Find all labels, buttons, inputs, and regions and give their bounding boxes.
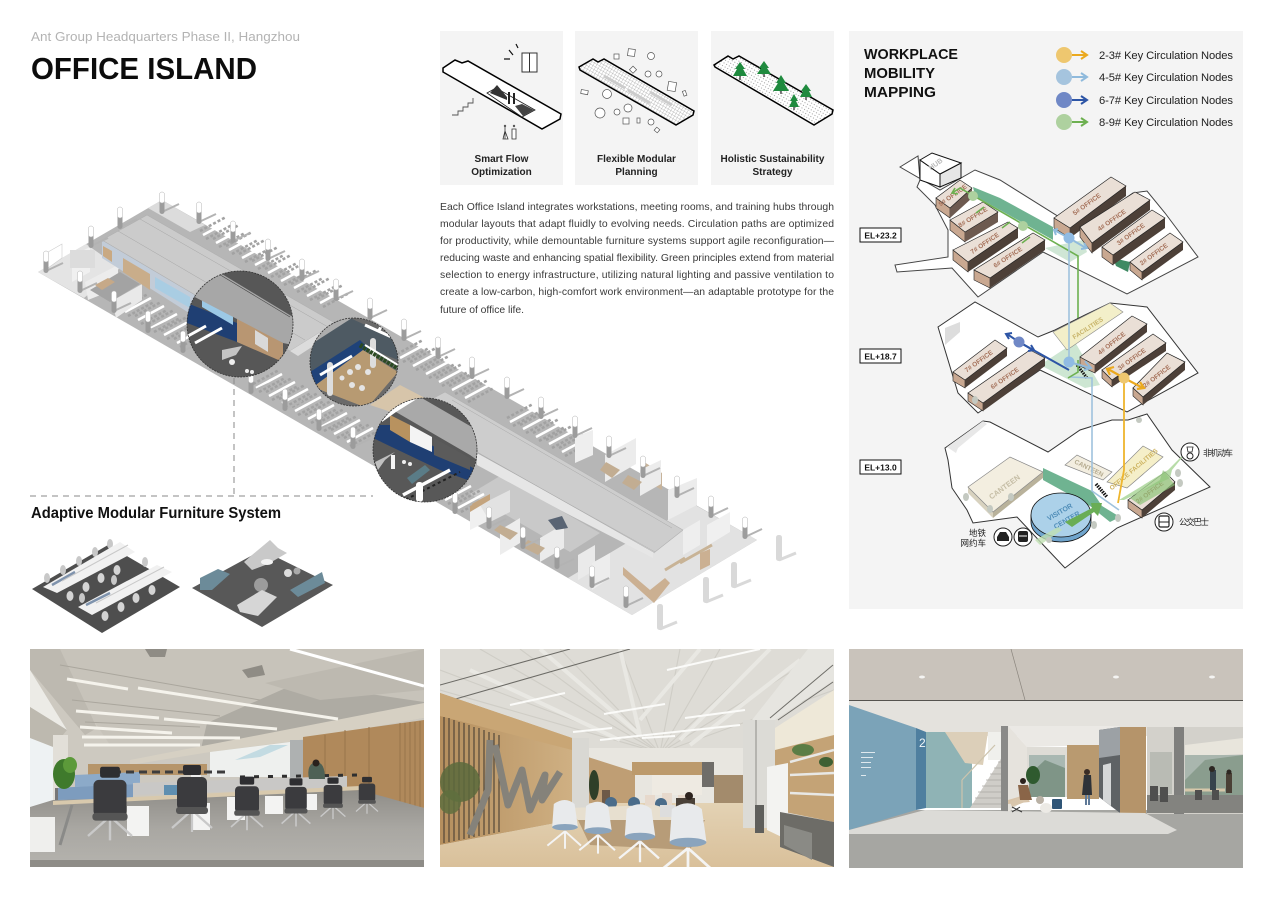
building: hub [920,153,961,187]
card: smart flow optimization: Smart Flow [475,154,529,165]
private offices north row [575,430,730,555]
card: flexible modular planning: Planning [615,167,658,178]
transport icon: non-motor vehicles: 非机动车 [1203,448,1233,458]
magnified view: cafe [310,318,398,408]
structural columns [44,192,796,630]
level plan EL+13.0 [945,396,1210,568]
west end meeting rooms [48,244,142,318]
floor plate [38,200,757,615]
description text: Each Office Island integrates workstations, meeting rooms, and training hubs through [440,202,834,213]
building: 4# office level 2 [1080,316,1147,373]
circulation nodes [968,191,1130,384]
transport icon: metro and ride hailing: 网约车 [960,538,986,548]
magnified view: breakout zone [373,397,477,505]
building: visitor center [1031,493,1091,542]
building: 4# office level 2: 4# OFFICE [1097,331,1128,357]
level plan EL+23.2 [895,153,1198,362]
title: OFFICE ISLAND [31,51,257,86]
elevation tags: EL+18.7 [864,352,897,362]
vertical circulation lines and nodes [1006,229,1144,510]
elevation tags: EL+13.0 [864,462,897,472]
building: 4# office [1080,192,1150,253]
stairs mark [1077,365,1087,378]
legend: 4-5# Key Circulation Nodes [1099,72,1233,84]
callout leader dashed line [30,378,373,496]
building: 5# office [1054,177,1126,238]
level plan EL+18.7 [938,302,1198,413]
private offices south row [470,490,712,603]
building: 3# office level 2 [1102,334,1166,387]
building: 2# office level 2: 2# OFFICE [1142,364,1173,390]
central core south [430,392,683,558]
description text: reducing waste and enhancing spatial flexibility. Green principles extend from material [440,253,834,264]
building: 6# office: 6# OFFICE [992,245,1024,270]
building: canteen west [968,457,1043,518]
building: 2# office level 3 [1128,472,1175,518]
building: canteen east: CANTEEN [1073,459,1105,479]
panel heading: MAPPING [864,84,936,101]
transport icon: non-motor vehicles [1181,443,1233,461]
subtitle: Ant Group Headquarters Phase II, Hangzhou [31,29,300,44]
building: 7# office level 2 [953,340,1007,388]
green entry arrows [1035,448,1190,545]
legend: 6-7# Key Circulation Nodes [1099,95,1233,107]
central core north [102,215,335,356]
building: 3# office level 2: 3# OFFICE [1117,347,1148,372]
transport icon: bus [1155,513,1209,531]
building: 6# office [974,233,1045,288]
building: facilities level 3: OFFICE FACILITIES [1109,447,1160,492]
building: 5# office: 5# OFFICE [1072,192,1103,217]
building: visitor center: VISITOR [1046,503,1074,523]
magnified view: lounge [187,271,293,377]
stairs mark level 3 [1096,484,1107,497]
panel heading: MOBILITY [864,65,935,82]
description text: future of office life. [440,305,524,316]
axonometric office floor [38,192,796,630]
card: holistic sustainability strategy: Strategy [752,167,793,178]
header [31,29,300,86]
card: holistic sustainability strategy: Holistic Sustainability [721,154,825,165]
trees [963,396,1183,543]
description text: for productivity, while demountable furniture systems support agile reconfiguration— [440,236,835,247]
photo: open-plan office [30,649,424,867]
building: 7# office: 7# OFFICE [970,231,1001,256]
transport icon: bus: 公交巴士 [1179,517,1209,527]
transport icon: metro and ride hailing: 地铁 [969,528,986,538]
building: 9# office: 9# OFFICE [938,183,969,208]
building: hub: HUB [928,158,944,172]
building: 7# office [953,222,1018,272]
legend [1056,47,1233,130]
building: 7# office level 2: 7# OFFICE [964,349,995,374]
photo: lobby and stairs [849,649,1243,868]
building: 2# office level 3: 2# OFFICE [1135,480,1166,505]
legend: 2-3# Key Circulation Nodes [1099,50,1233,62]
legend: 8-9# Key Circulation Nodes [1099,117,1233,129]
building: 2# office: 2# OFFICE [1139,242,1170,267]
heading: furniture system: Adaptive Modular Furniture System [31,505,281,522]
building: facilities [1053,303,1123,350]
building: 6# office level 2 [968,350,1045,411]
building: canteen east [1065,455,1112,480]
building: 4# office: 4# OFFICE [1097,208,1128,233]
description text: create a low-carbon, high-comfort work environment—an adaptable prototype for the [440,287,834,298]
building: canteen west: CANTEEN [987,473,1022,501]
workstation rows [122,217,591,512]
card: flexible modular planning [575,31,698,185]
card: smart flow optimization: Optimization [471,167,532,178]
description text: modular layouts that adapt fluidly to evolving needs. Circulation paths are optimized [440,219,834,230]
building: 2# office level 2 [1133,353,1185,405]
building: 8# office [950,202,998,242]
elevation tags [860,228,901,474]
elevation tags: EL+23.2 [864,230,897,240]
card: holistic sustainability strategy [711,31,834,185]
furniture module: lounge [192,540,333,627]
description text: selection to energy infrastructure, utilizing natural lighting and passive ventilation to [440,270,834,281]
transport icon: metro and ride hailing [960,528,1032,548]
building: 6# office level 2: 6# OFFICE [990,366,1021,391]
photo: lobby and stairs: 2 [919,736,926,750]
description text [440,202,835,316]
building: facilities: FACILITIES [1072,316,1105,341]
panel: strategy icons [440,31,834,185]
panel: workplace mobility mapping [849,31,1243,609]
building: 3# office: 3# OFFICE [1116,222,1147,247]
card: smart flow optimization [440,31,563,185]
card: flexible modular planning: Flexible Modular [597,154,676,165]
panel heading [864,46,958,101]
building: 8# office: 8# OFFICE [957,206,990,229]
panel heading: WORKPLACE [864,46,958,63]
building: 2# office [1130,233,1183,280]
building: visitor center: CENTER [1053,510,1081,531]
building: 3# office [1102,210,1165,265]
green circulation path [952,188,1078,362]
building: 9# office [936,180,972,218]
photo: collaboration space [439,649,834,873]
furniture module: workstations [32,539,180,633]
